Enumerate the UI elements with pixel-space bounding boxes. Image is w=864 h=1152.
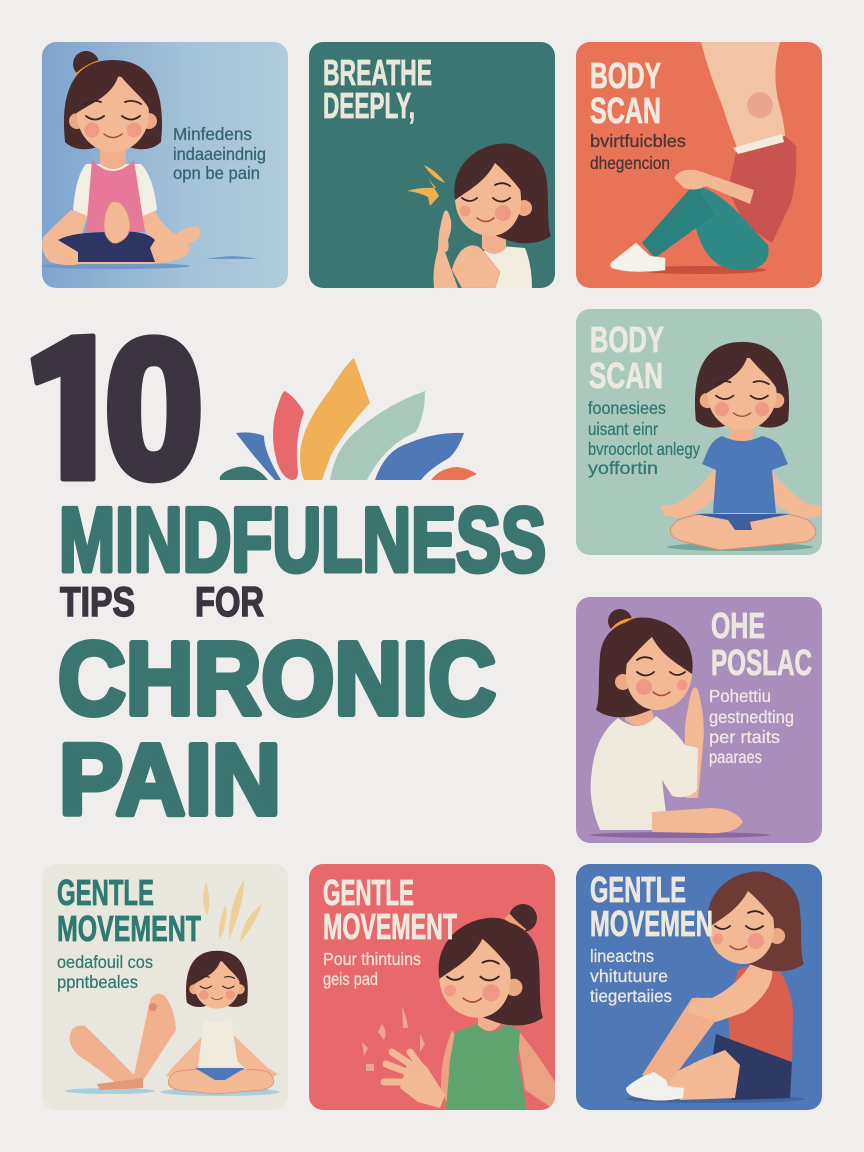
- heading: BODY: [590, 319, 664, 360]
- tip text: dhegencion: [590, 153, 670, 173]
- heading: BREATHE: [323, 52, 432, 93]
- tip text: per rtaits: [709, 727, 780, 747]
- panel: gentle movement coral card: [309, 864, 555, 1110]
- heading: [590, 62, 662, 124]
- heading: GENTLE: [323, 872, 414, 913]
- heading: [324, 60, 432, 124]
- tip text: indaaeindnig: [173, 144, 266, 164]
- panel: gentle movement blue card: [576, 864, 822, 1110]
- heading: [324, 879, 458, 940]
- subtitle: TIPS: TIPS: [60, 578, 135, 625]
- panel: body scan card: [576, 42, 822, 288]
- title number: 10: 0: [105, 300, 203, 518]
- heading: [590, 876, 712, 937]
- illustration: girl in cream sweater: [590, 609, 770, 838]
- icon: colourful lotus logo: [220, 358, 477, 480]
- panel: sage body scan card: [576, 309, 824, 555]
- heading: MOVEMENT: [57, 908, 201, 949]
- tip text: opn be pain: [173, 163, 260, 183]
- heading: OHE: [711, 605, 765, 646]
- title number: 10: 1: [60, 302, 94, 517]
- heading: BODY: [590, 55, 661, 96]
- tip text: gestnedting: [709, 707, 794, 727]
- illustration: foot and seated girl: [65, 951, 280, 1096]
- tip text: [173, 124, 266, 183]
- heading: GENTLE: [57, 872, 154, 913]
- panel: purple posture card: [576, 597, 822, 843]
- tip text: uisant einr: [588, 419, 658, 439]
- decorative pale marks: [362, 1006, 425, 1071]
- tip text: geis pad: [323, 969, 378, 989]
- heading: GENTLE: [590, 869, 686, 910]
- title number: 10: [33, 300, 203, 518]
- title: CHRONIC: CHRONIC: [58, 621, 496, 736]
- heading: [58, 879, 201, 942]
- heading: SCAN: [589, 355, 663, 396]
- tip text: Pohettiu: [709, 686, 771, 706]
- illustration: seated girl in blue tee: [660, 342, 824, 551]
- panel: mindfulness tip card: [40, 42, 288, 288]
- panel: breathe deeply card: [309, 42, 555, 288]
- heading: SCAN: [590, 90, 661, 131]
- tip text: Minfedens: [173, 124, 252, 144]
- title: PAIN: PAIN: [59, 724, 281, 836]
- decorative yellow rays: [203, 880, 262, 942]
- tip text: vhitutuure: [590, 966, 668, 986]
- tip text: [588, 398, 700, 478]
- illustration: meditating girl with pink top: [40, 51, 258, 269]
- tip text: lineactns: [590, 946, 654, 966]
- tip text: [57, 952, 153, 992]
- illustration: girl hugging knee: [625, 871, 805, 1103]
- tip text: oedafouil cos: [57, 952, 153, 972]
- panel: gentle movement cream card: [42, 864, 288, 1110]
- tip text: [323, 949, 421, 989]
- tip text: paaraes: [709, 747, 762, 767]
- illustration: girl in green tank with open hand: [384, 904, 555, 1110]
- subtitle: FOR: FOR: [195, 578, 264, 625]
- illustration: breathing girl: [434, 143, 551, 288]
- heading: DEEPLY,: [323, 85, 415, 126]
- heading: MOVEMENT: [323, 906, 457, 947]
- title: MINDFULNESS: MINDFULNESS: [59, 490, 546, 591]
- tip text: tiegertaiies: [590, 986, 672, 1006]
- tip text: [709, 686, 794, 767]
- tip text: foonesiees: [588, 398, 666, 418]
- tip text: bvroocrlot anlegy: [588, 439, 700, 459]
- tip text: yoffortin: [588, 458, 658, 478]
- tip text: Pour thintuins: [323, 949, 421, 969]
- heading: [589, 326, 664, 389]
- illustration: sitting figure with red shirt: [610, 42, 796, 274]
- tip text: [590, 131, 686, 173]
- heading: POSLAC: [711, 642, 812, 683]
- tip text: bvirtfuicbles: [590, 131, 686, 151]
- tip text: ppntbeales: [57, 972, 138, 992]
- tip text: [590, 946, 672, 1006]
- icon: breath arrow: [407, 165, 445, 206]
- heading: MOVEMEN: [590, 903, 713, 944]
- heading: [712, 612, 812, 676]
